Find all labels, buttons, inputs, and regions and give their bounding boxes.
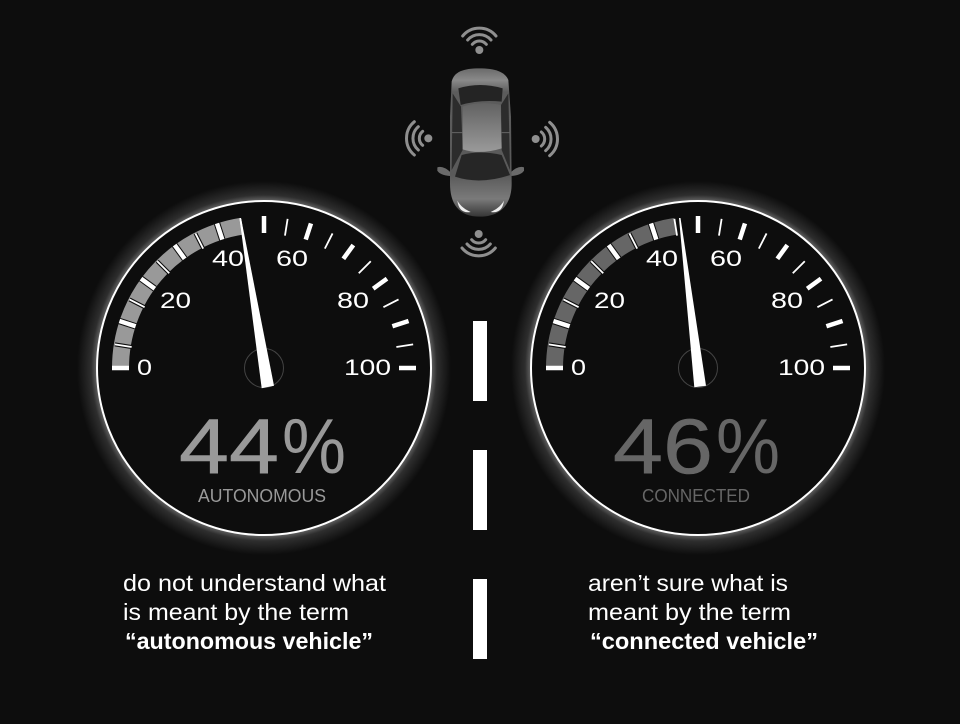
caption: autonomous: do not understand what xyxy=(123,570,387,596)
scale labels: 20 xyxy=(160,288,191,313)
label: autonomous: AUTONOMOUS xyxy=(198,485,326,506)
caption: connected: aren’t sure what is xyxy=(588,570,788,596)
gauge dial xyxy=(531,201,865,535)
caption: autonomous: “autonomous vehicle” xyxy=(125,628,373,654)
scale labels: 40 xyxy=(646,246,678,271)
caption: autonomous: is meant by the term xyxy=(123,599,349,625)
value 44%: % xyxy=(282,402,346,490)
icon: wifi signal top xyxy=(463,28,496,54)
caption: connected: “connected vehicle” xyxy=(590,628,818,654)
progress band 46 percent xyxy=(554,226,676,368)
scale labels xyxy=(571,246,825,380)
scale labels: 60 xyxy=(710,246,742,271)
gauge dial xyxy=(97,201,431,535)
scale labels: 80 xyxy=(337,288,369,313)
value 46%: % xyxy=(716,402,780,490)
needle hub xyxy=(244,348,284,388)
caption: autonomous xyxy=(123,570,387,654)
needle xyxy=(240,218,274,388)
lane markings xyxy=(473,321,487,659)
scale labels xyxy=(137,246,391,380)
tick marks xyxy=(546,216,850,368)
value 46%: 46 xyxy=(613,402,713,490)
icon: car top view xyxy=(437,68,524,217)
value 44%: 44 xyxy=(179,402,279,490)
scale labels: 60 xyxy=(276,246,308,271)
label: connected: CONNECTED xyxy=(642,485,750,506)
needle xyxy=(679,218,706,387)
gauge glow xyxy=(511,181,885,555)
scale labels: 80 xyxy=(771,288,803,313)
gauge: connected xyxy=(511,181,885,555)
progress band 44 percent xyxy=(120,226,242,368)
icon: wifi signal right xyxy=(532,122,557,156)
caption: connected xyxy=(588,570,818,654)
icon: wifi signal left xyxy=(407,122,432,155)
icon: wifi signal bottom xyxy=(462,230,495,256)
scale labels: 100 xyxy=(344,355,391,380)
value 46% xyxy=(613,402,780,490)
caption: connected: meant by the term xyxy=(588,599,791,625)
gauge glow xyxy=(77,181,451,555)
gauge: autonomous xyxy=(77,181,451,555)
tick marks xyxy=(112,216,416,368)
scale labels: 40 xyxy=(212,246,244,271)
scale labels: 0 xyxy=(137,355,152,380)
car with wireless signals xyxy=(407,28,557,256)
scale labels: 100 xyxy=(778,355,825,380)
scale labels: 20 xyxy=(594,288,625,313)
value 44% xyxy=(179,402,346,490)
needle hub xyxy=(678,348,718,388)
scale labels: 0 xyxy=(571,355,586,380)
